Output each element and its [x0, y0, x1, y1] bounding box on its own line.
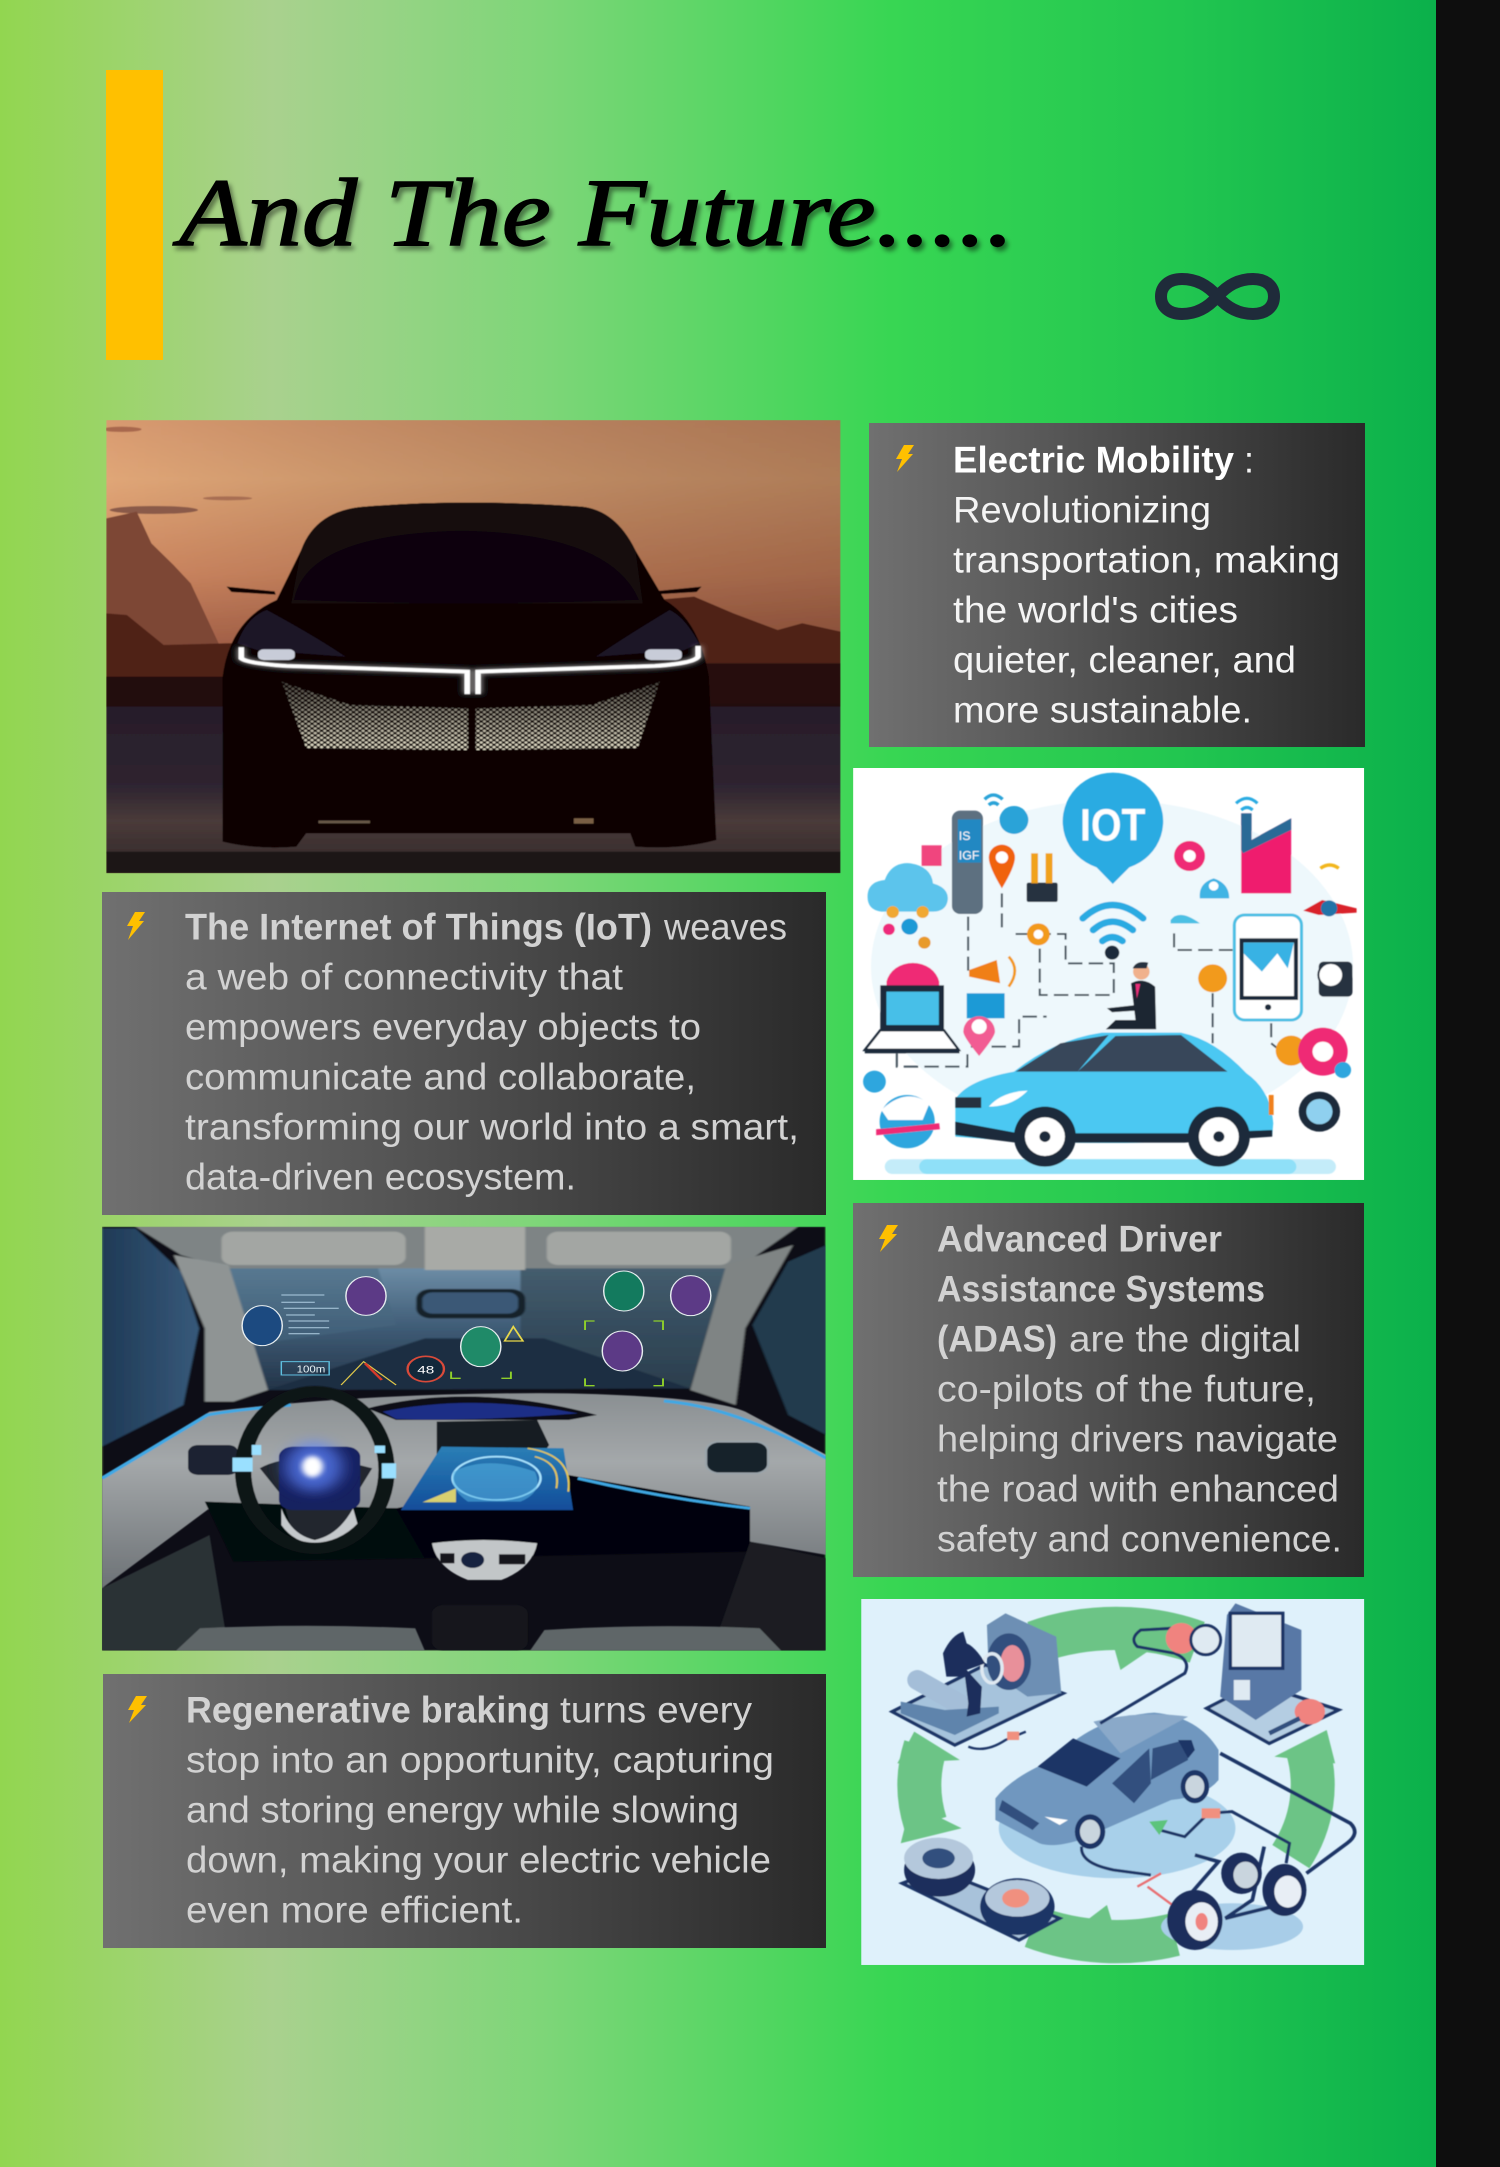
panel: advanced driver assistance systems: Advanced Driver [937, 1219, 1222, 1260]
panel: internet of things: transforming our world into a smart, [185, 1107, 799, 1148]
yellow accent bar [106, 70, 163, 360]
photo: electric car at sunset [102, 420, 841, 873]
center controls [432, 1540, 537, 1580]
center screen [401, 1447, 573, 1510]
green cycle arcs [919, 1628, 1313, 1942]
HUD [242, 1271, 711, 1371]
icon: lightning bolt [128, 1696, 147, 1723]
right column [1174, 841, 1205, 871]
panel: regenerative braking: down, making your electric vehicle [186, 1840, 771, 1881]
car body [223, 502, 716, 848]
illustration: regenerative braking cycle [861, 1599, 1364, 1965]
panel: regenerative braking: turns every [560, 1690, 753, 1731]
photo: ADAS car interior: 48 [417, 1364, 434, 1376]
light bar glow [241, 646, 698, 694]
steering wheel [260, 1458, 372, 1539]
cloud [868, 863, 948, 912]
panel: electric mobility [869, 423, 1365, 747]
icon: lightning bolt [896, 445, 914, 472]
panel: advanced driver assistance systems: helping drivers navigate [937, 1419, 1338, 1460]
illustration: IoT connected car: IGF [959, 849, 979, 862]
wifi [1083, 905, 1143, 941]
panel: internet of things: empowers everyday objects to [185, 1007, 701, 1048]
photo: ADAS car interior: 100m [297, 1363, 325, 1375]
panel: internet of things: communicate and collaborate, [185, 1057, 696, 1098]
dashboard [102, 1393, 827, 1588]
panel: regenerative braking: stop into an opportunity, capturing [186, 1740, 774, 1781]
globe [880, 1095, 935, 1148]
panel: regenerative braking [103, 1674, 826, 1948]
panel: electric mobility: : [1244, 440, 1254, 481]
right black strip [1436, 0, 1500, 2167]
panel: advanced driver assistance systems: Assistance Systems [937, 1269, 1265, 1310]
title: And The Future..... [172, 159, 1014, 266]
car [955, 1033, 1273, 1143]
device [952, 811, 983, 914]
panel: internet of things [102, 892, 826, 1215]
car shadow [999, 1778, 1235, 1878]
dashed links [897, 893, 1277, 1067]
panel: electric mobility: quieter, cleaner, and [953, 640, 1296, 681]
panel: electric mobility: Electric Mobility [953, 440, 1234, 481]
megaphone [969, 960, 1000, 983]
icon: lightning bolt [879, 1225, 898, 1252]
illustration: IoT connected car [853, 768, 1364, 1180]
panel: electric mobility: Revolutionizing [953, 490, 1211, 531]
panel: internet of things: a web of connectivity that [185, 957, 624, 998]
panel: internet of things: The Internet of Things (IoT) [185, 907, 652, 948]
laptop [886, 963, 939, 987]
photo: ADAS car interior [102, 1227, 827, 1651]
panel: internet of things: weaves [663, 907, 787, 948]
panel: electric mobility: the world's cities [953, 590, 1238, 631]
panel: internet of things: data-driven ecosystem. [185, 1157, 576, 1198]
panel: regenerative braking: and storing energy while slowing [186, 1790, 739, 1831]
roof and pillars [135, 1227, 798, 1268]
panel: regenerative braking: Regenerative braking [186, 1690, 550, 1731]
panel: advanced driver assistance systems: the road with enhanced [937, 1469, 1339, 1510]
person [1133, 964, 1150, 980]
pins and icons [989, 845, 1015, 888]
machine top left [892, 1665, 1063, 1745]
panel: advanced driver assistance systems: co-pilots of the future, [937, 1369, 1316, 1410]
panel: electric mobility: more sustainable. [953, 690, 1252, 731]
illustration: IoT connected car: IOT [1080, 799, 1145, 850]
illustration: IoT connected car: IS [959, 829, 971, 843]
seats [176, 1626, 425, 1651]
panel: advanced driver assistance systems: safety and convenience. [937, 1519, 1342, 1560]
cables [1100, 1628, 1208, 1723]
panel: regenerative braking: even more efficient. [186, 1890, 523, 1931]
console top [437, 1420, 549, 1455]
panel: advanced driver assistance systems: (ADAS) [937, 1319, 1057, 1360]
IOT bubble [1063, 773, 1163, 884]
grille dots [282, 682, 660, 750]
panel: electric mobility: transportation, making [953, 540, 1340, 581]
panel: advanced driver assistance systems: are the digital [1069, 1319, 1301, 1360]
icon: infinity [1161, 279, 1274, 314]
scooter [1161, 1903, 1303, 1950]
machine top right [1207, 1683, 1339, 1743]
tyres platform [902, 1870, 1060, 1940]
icon: lightning bolt [127, 912, 145, 940]
car [995, 1713, 1219, 1845]
panel: advanced driver assistance systems [853, 1203, 1364, 1577]
